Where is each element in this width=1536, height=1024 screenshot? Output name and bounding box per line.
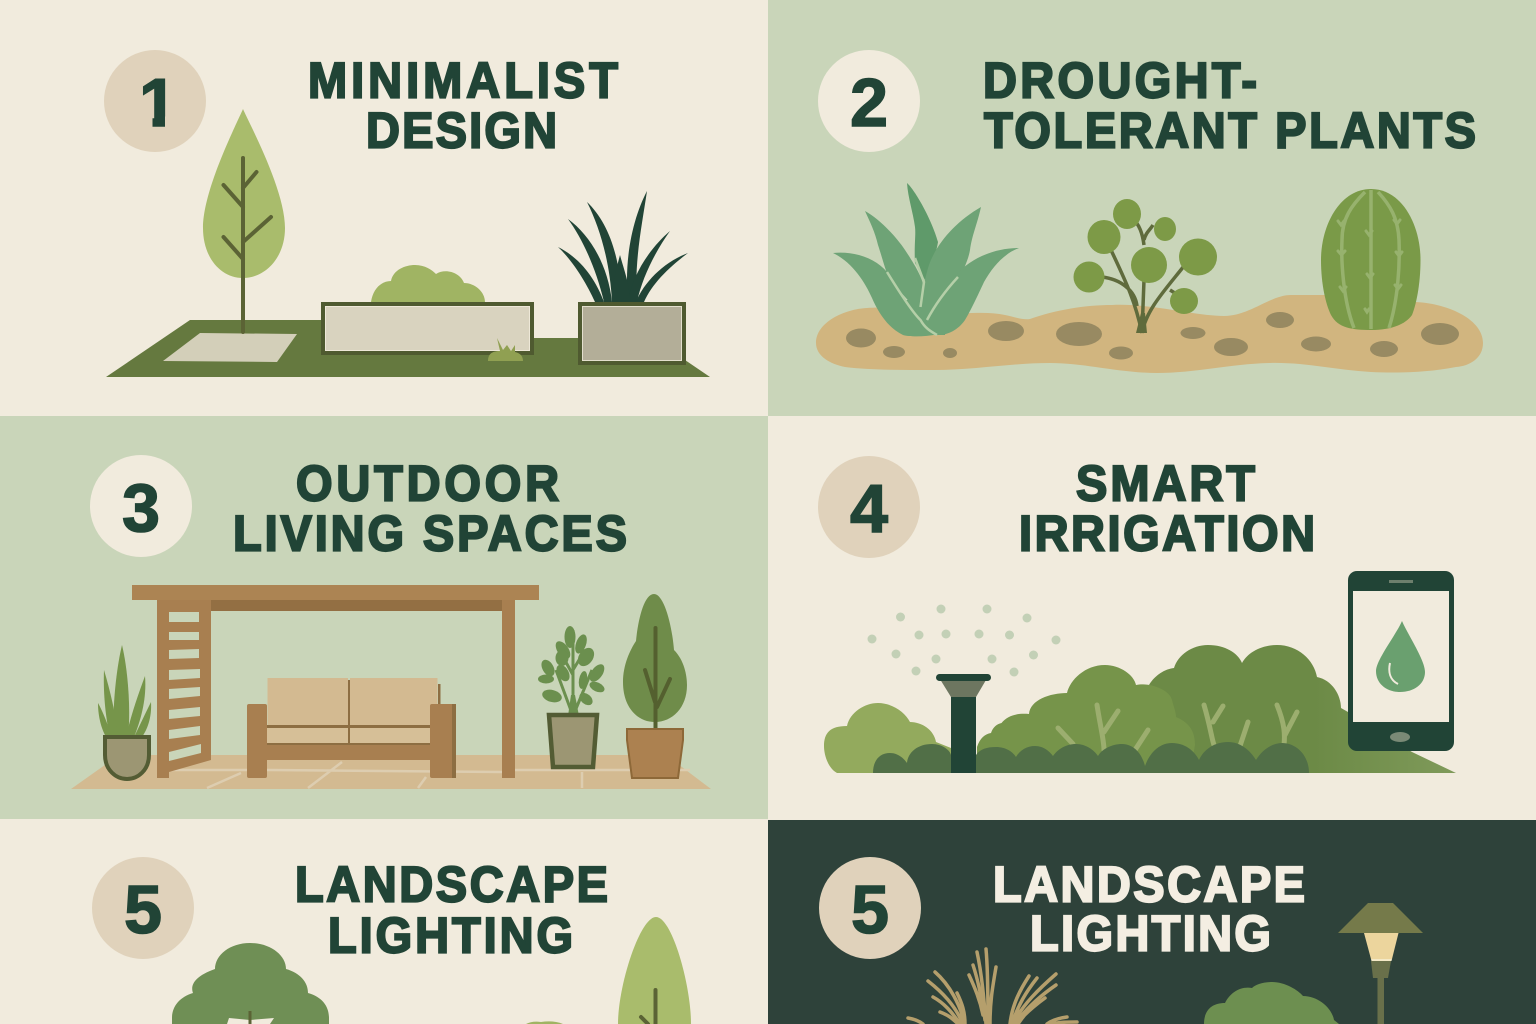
square planter xyxy=(580,304,684,363)
icon: spiky plant xyxy=(558,191,688,302)
heading: smart irrigation: IRRIGATION xyxy=(1019,506,1315,562)
heading: outdoor living spaces: LIVING SPACES xyxy=(233,506,627,562)
panel: minimalist design xyxy=(104,50,710,377)
number badge 5: 5 xyxy=(851,872,889,948)
icon: barrel cactus xyxy=(1321,189,1420,330)
middle shrub xyxy=(977,665,1195,773)
heading: minimalist design: MINIMALIST xyxy=(308,53,618,109)
icon: smartphone with water drop xyxy=(1348,571,1454,751)
shrub twigs xyxy=(1058,705,1297,750)
heading: landscape lighting xyxy=(993,857,1305,962)
heading: drought-tolerant plants: TOLERANT PLANTS xyxy=(984,103,1476,159)
long concrete planter xyxy=(323,304,532,353)
icon: potted leafy plant xyxy=(538,626,607,767)
icon: slender tree xyxy=(203,109,285,332)
icon: round-leaf shrub xyxy=(1074,199,1217,333)
icon: ornamental grass xyxy=(908,949,1077,1024)
icon: slender tree xyxy=(618,917,691,1024)
number badge 5 xyxy=(819,857,921,959)
icon: pergola xyxy=(132,585,539,778)
number badge 2: 2 xyxy=(850,65,888,141)
icon: potted tree xyxy=(623,594,687,778)
heading: landscape lighting: LANDSCAPE xyxy=(295,857,608,913)
heading: smart irrigation: SMART xyxy=(1076,456,1255,512)
icon: garden lamp xyxy=(1338,903,1423,1024)
panel: drought-tolerant plants xyxy=(768,0,1536,416)
green bush xyxy=(1204,982,1339,1024)
panel: landscape lighting (light) xyxy=(0,819,768,1024)
heading: drought-tolerant plants: DROUGHT- xyxy=(983,53,1257,109)
heading: landscape lighting: LANDSCAPE xyxy=(993,857,1305,913)
number badge 4 xyxy=(818,456,920,558)
number badge 3 xyxy=(90,455,192,557)
heading: minimalist design: DESIGN xyxy=(366,103,557,159)
heading: minimalist design xyxy=(308,53,618,159)
heading: landscape lighting xyxy=(295,857,608,964)
number badge 5: 5 xyxy=(124,872,162,948)
number badge 1 xyxy=(104,50,206,152)
number badge 5 xyxy=(92,857,194,959)
number badge 3: 3 xyxy=(122,470,160,546)
heading: smart irrigation xyxy=(1019,456,1315,562)
ground lawn xyxy=(106,320,710,377)
soil pebbles xyxy=(846,312,1459,360)
icon: sofa xyxy=(247,678,456,778)
dark low hedge xyxy=(873,742,1309,773)
heading: outdoor living spaces: OUTDOOR xyxy=(296,456,559,512)
icon: round tree xyxy=(172,943,329,1024)
number badge 2 xyxy=(818,50,920,152)
stone patio xyxy=(71,755,711,789)
panel: smart irrigation xyxy=(768,416,1536,820)
heading: landscape lighting: LIGHTING xyxy=(1030,906,1271,962)
water spray droplets xyxy=(868,604,1060,676)
heading: drought-tolerant plants xyxy=(983,53,1476,159)
panel: landscape lighting (dark) xyxy=(768,820,1536,1024)
small grass tuft xyxy=(488,338,523,361)
paving slab xyxy=(163,333,297,362)
small bush xyxy=(526,1021,563,1024)
icon: bush behind planter xyxy=(371,265,485,302)
icon: agave xyxy=(833,183,1019,336)
number badge 4: 4 xyxy=(850,471,888,547)
icon: potted snake plant xyxy=(98,645,151,779)
heading: outdoor living spaces xyxy=(233,456,627,562)
heading: landscape lighting: LIGHTING xyxy=(328,908,573,964)
panel: outdoor living spaces xyxy=(0,416,768,819)
left shrub xyxy=(824,703,951,773)
number badge 1: 1 xyxy=(139,65,177,141)
icon: pop-up sprinkler xyxy=(936,674,991,773)
back shrub xyxy=(1100,645,1456,773)
sandy soil bed xyxy=(816,295,1483,373)
